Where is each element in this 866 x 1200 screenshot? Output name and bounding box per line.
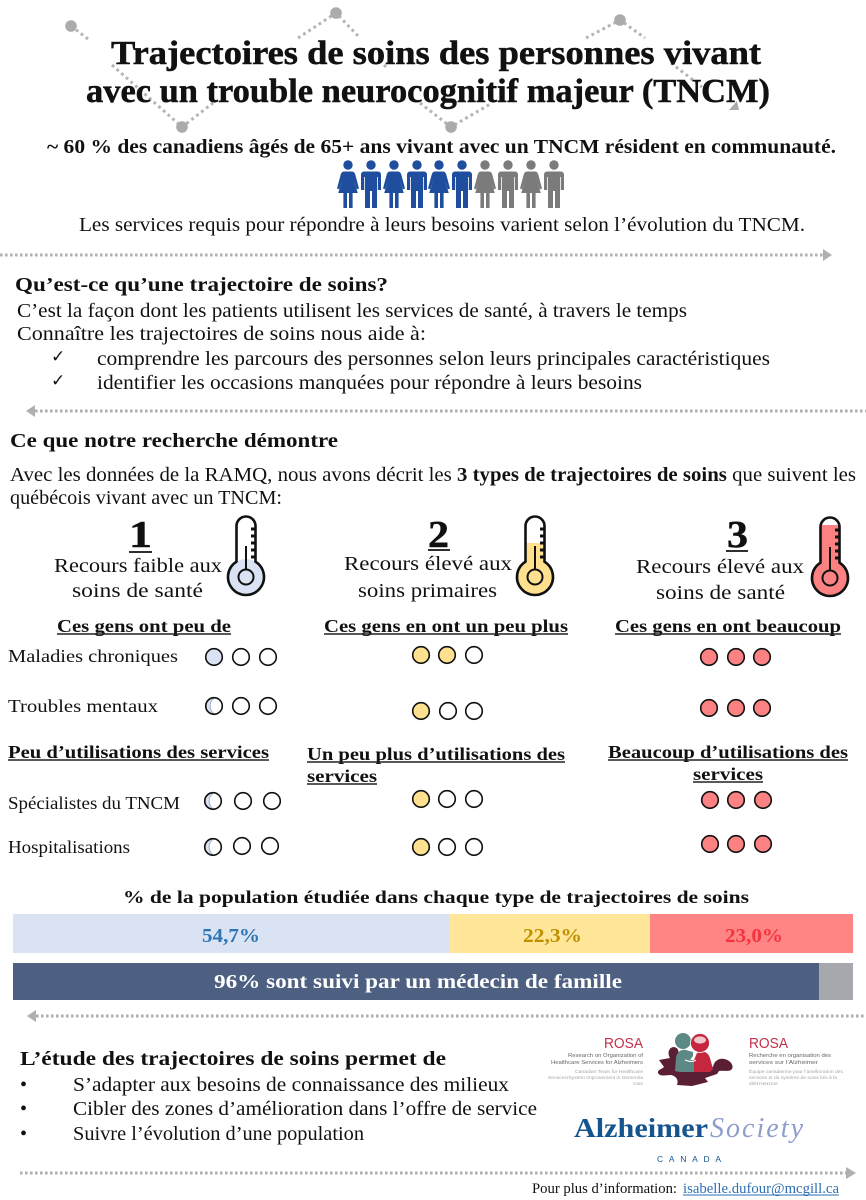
checklist: identifier les occasions manquées pour répondre à leurs besoins: [97, 372, 642, 394]
research intro text: québécois vivant avec un TNCM:: [10, 487, 282, 509]
definition text: Connaître les trajectoires de soins nous aide à:: [17, 323, 426, 345]
contact line: isabelle.dufour@mcgill.ca: [683, 1181, 839, 1197]
logo text: ROSA french: services sur l’Alzheimer: [749, 1060, 818, 1066]
row: dementia specialists: Spécialistes du TNCM: [8, 793, 180, 813]
column headings: service use: services: [693, 764, 763, 784]
row: chronic diseases: Maladies chroniques: [8, 646, 178, 666]
bullet list: •: [20, 1098, 27, 1120]
bullet list: •: [20, 1074, 27, 1096]
column headings: service use: services: [307, 766, 377, 786]
heading: research: Ce que notre recherche démontre: [10, 430, 338, 452]
column headings: service use: Un peu plus d’utilisations des: [307, 744, 565, 764]
row: chronic diseases: [8, 646, 770, 666]
column headings: comorbidity: Ces gens ont peu de: [57, 616, 231, 636]
logo text: ROSA english: ROSA: [604, 1035, 643, 1052]
panel: type 3 header: soins de santé: [656, 582, 785, 604]
row: mental disorders: Troubles mentaux: [8, 696, 158, 716]
heading: benefits: L’étude des trajectoires de soins permet de: [20, 1048, 446, 1070]
checklist: ✓: [51, 371, 65, 391]
logo text: ROSA english: Healthcare Services for Alzheimers: [551, 1060, 643, 1066]
heading: definition: Qu’est-ce qu’une trajectoire de soins?: [15, 274, 388, 296]
row: dementia specialists: [8, 791, 771, 813]
logo text: ROSA french: [749, 1035, 844, 1086]
column headings: service use: Peu d’utilisations des services: [8, 742, 269, 762]
stacked bar: trajectory share: 22,3%: [523, 925, 582, 947]
logo: Alzheimer Society Canada: CANADA: [657, 1154, 721, 1164]
panel: type 1 header: soins de santé: [72, 580, 203, 602]
arrow: divider left: [27, 1010, 866, 1022]
column headings: comorbidity: Ces gens en ont beaucoup: [615, 616, 841, 636]
icon: puzzle and two figures: [658, 1033, 733, 1086]
bar: family doctor follow-up: 96% sont suivi par un médecin de famille: [214, 971, 622, 993]
panel: study benefits: [20, 1048, 537, 1145]
logo: Alzheimer Society Canada: Alzheimer: [574, 1113, 708, 1143]
logo text: ROSA english: Services/System Improvement in Dementia: [548, 1075, 643, 1080]
logo text: ROSA french: services et du système de soins liés à la: [749, 1075, 837, 1080]
bullet list: S’adapter aux besoins de connaissance des milieux: [73, 1074, 509, 1096]
column headings: service use: [8, 742, 848, 786]
logo text: ROSA french: ROSA: [749, 1035, 788, 1052]
title: [86, 35, 770, 110]
arrow: divider right: [20, 1167, 856, 1179]
logo: Alzheimer Society Canada: Society: [710, 1113, 804, 1144]
background zigzag trajectory: [65, 7, 739, 133]
bullet list: Cibler des zones d’amélioration dans l’offre de service: [73, 1098, 537, 1120]
logo: Alzheimer Society Canada: [574, 1113, 804, 1164]
title: avec un trouble neurocognitif majeur (TNCM): [86, 73, 770, 110]
panel: type 3 header: 3: [727, 514, 748, 556]
checklist: ✓: [51, 347, 65, 367]
bullet list: •: [20, 1123, 27, 1145]
logo text: ROSA french: démence: [749, 1081, 779, 1086]
column headings: service use: Beaucoup d’utilisations des: [608, 742, 848, 762]
logo: ROSA: [548, 1033, 844, 1086]
bullet list: Suivre l’évolution d’une population: [73, 1123, 364, 1145]
stacked bar: trajectory share: 54,7%: [202, 925, 260, 947]
row: hospitalisations: [8, 836, 771, 857]
title: Trajectoires de soins des personnes vivant: [111, 35, 762, 72]
checklist: [51, 347, 770, 394]
panel: type 3 header: [636, 514, 848, 604]
contact line: [532, 1181, 839, 1197]
definition text: C’est la façon dont les patients utilisent les services de santé, à travers le temps: [17, 300, 687, 322]
column headings: comorbidity: [57, 616, 841, 636]
panel: type 1 header: Recours faible aux: [54, 555, 222, 577]
arrow: divider left: [26, 405, 866, 417]
bullet list: [20, 1074, 537, 1145]
panel: type 2 header: Recours élevé aux: [344, 553, 512, 575]
services sentence: Les services requis pour répondre à leurs besoins varient selon l’évolution du TNCM.: [79, 214, 805, 236]
icon: ten people, six highlighted: [337, 160, 564, 208]
research intro text: [10, 464, 856, 509]
logo text: ROSA french: Recherche en organisation des: [749, 1053, 831, 1059]
statistic sentence: ~ 60 % des canadiens âgés de 65+ ans vivant avec un TNCM résident en communauté.: [47, 136, 836, 158]
panel: type 1 header: 1: [129, 514, 152, 556]
panel: type 3 header: Recours élevé aux: [636, 556, 804, 578]
panel: type 2 header: soins primaires: [358, 580, 497, 602]
logo text: ROSA english: Canadian Team for Healthcare: [575, 1069, 643, 1074]
heading: population chart: % de la population étudiée dans chaque type de trajectoires de soins: [123, 887, 749, 907]
panel: definition: [15, 274, 770, 394]
checklist: comprendre les parcours des personnes selon leurs principales caractéristiques: [97, 348, 770, 370]
contact line: Pour plus d’information:: [532, 1181, 677, 1197]
row: hospitalisations: Hospitalisations: [8, 837, 130, 857]
logo text: ROSA english: Research on Organization of: [568, 1053, 643, 1059]
panel: type 2 header: 2: [428, 514, 449, 556]
stacked bar: trajectory share: 23,0%: [725, 925, 783, 947]
arrow: divider right: [0, 249, 832, 261]
definition text: [17, 300, 687, 345]
row: mental disorders: [8, 696, 770, 719]
logo text: ROSA french: Équipe canadienne pour l’amélioration des: [749, 1068, 844, 1074]
column headings: comorbidity: Ces gens en ont un peu plus: [324, 616, 568, 636]
logo text: ROSA english: [548, 1035, 643, 1086]
stacked bar: trajectory share: [13, 914, 853, 953]
panel: type 1 header: [54, 514, 264, 602]
research intro text: Avec les données de la RAMQ, nous avons décrit les 3 types de trajectoires de soins que suivent les: [10, 464, 856, 486]
panel: type 2 header: [344, 514, 553, 602]
bar: family doctor follow-up: [13, 963, 853, 1000]
icon: thermometer low: [228, 516, 264, 595]
logo text: ROSA english: Care: [633, 1081, 643, 1086]
icon: thermometer medium: [517, 516, 553, 595]
icon: thermometer high: [812, 518, 848, 596]
